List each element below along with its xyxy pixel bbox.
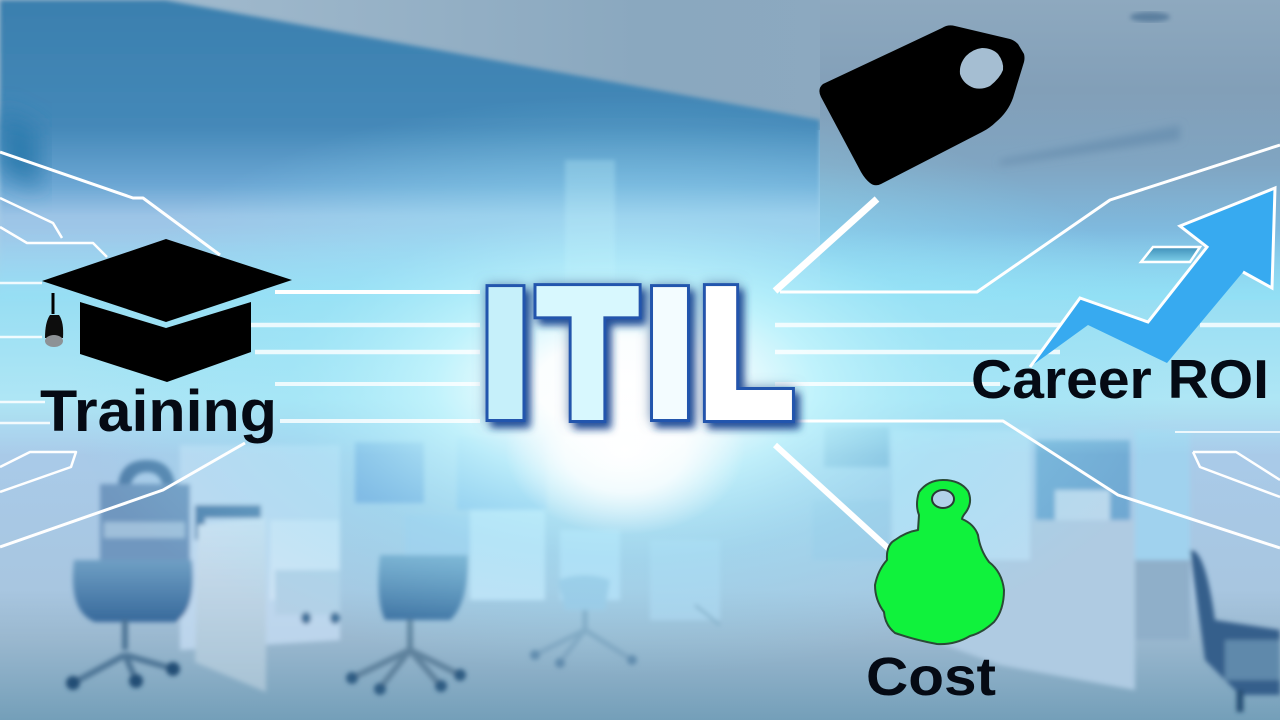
- icon: growth arrow: [1030, 188, 1275, 367]
- small parallelogram behind arrow: [1141, 247, 1200, 262]
- title: ITIL: T: [539, 253, 636, 453]
- connector: title to cost weight: [775, 445, 889, 549]
- label: Training: Training: [40, 379, 277, 444]
- title: ITIL: L: [700, 254, 792, 454]
- ceiling: [0, 0, 1280, 130]
- horizontal light band: [0, 230, 1280, 455]
- tag hole: [960, 48, 1003, 89]
- icon: graduation cap: [42, 239, 292, 382]
- title: ITIL: I: [480, 253, 531, 454]
- right wall: [820, 0, 1280, 300]
- circuit lines: [0, 145, 1280, 548]
- lower office: [0, 420, 1280, 720]
- icon: cost weight: [875, 480, 1004, 644]
- icon: price tag: [819, 25, 1024, 185]
- desks and chairs: [66, 427, 1280, 712]
- title: ITIL: I: [645, 253, 695, 454]
- label: Cost: Cost: [866, 647, 996, 707]
- left wall: [0, 0, 820, 300]
- title: ITIL: [480, 253, 792, 454]
- label: Career ROI: Career ROI: [971, 348, 1269, 410]
- connector: price tag to title: [775, 199, 877, 291]
